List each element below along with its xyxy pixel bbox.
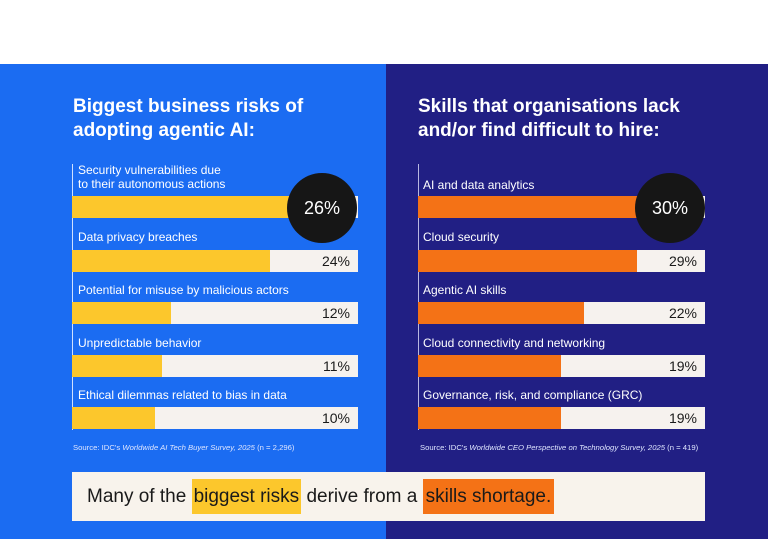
panel: left risks bbox=[0, 64, 386, 539]
row 5: Ethical dilemmas related to bias in data bbox=[78, 388, 287, 402]
right bar chart: 19% bbox=[669, 358, 697, 374]
left bar chart: 11% bbox=[323, 358, 350, 374]
banner: conclusion bbox=[72, 472, 705, 521]
right bar chart: 19% bbox=[669, 410, 697, 426]
banner: conclusion: Many of the biggest risks derive from a skills shortage. bbox=[87, 486, 551, 507]
row 1 bbox=[78, 163, 225, 191]
left title: adopting agentic AI: bbox=[73, 120, 255, 141]
row 1: AI and data analytics bbox=[423, 178, 534, 192]
callout: 30% bbox=[635, 173, 705, 243]
right bar chart: 22% bbox=[669, 305, 697, 321]
right bar chart: 29% bbox=[669, 253, 697, 269]
row 5: Governance, risk, and compliance (GRC) bbox=[423, 388, 642, 402]
right title: Skills that organisations lack bbox=[418, 96, 680, 117]
left title bbox=[73, 96, 304, 141]
panel: right skills bbox=[386, 64, 768, 539]
row 4: Cloud connectivity and networking bbox=[423, 336, 605, 350]
row 4: Unpredictable behavior bbox=[78, 336, 201, 350]
row 3: Potential for misuse by malicious actors bbox=[78, 283, 289, 297]
right title bbox=[418, 96, 680, 141]
row 2: Data privacy breaches bbox=[78, 230, 197, 244]
callout: 30%: 30% bbox=[652, 198, 688, 218]
left title: Biggest business risks of bbox=[73, 96, 303, 117]
right title: and/or find difficult to hire: bbox=[418, 120, 660, 141]
right axis line bbox=[418, 164, 419, 430]
right source: Source: IDC's Worldwide CEO Perspective on Technology Survey, 2025 (n = 419) bbox=[420, 443, 698, 452]
row 1: to their autonomous actions bbox=[78, 177, 225, 191]
left bar chart: 10% bbox=[322, 410, 350, 426]
right bar chart bbox=[418, 178, 705, 429]
left axis line bbox=[72, 164, 73, 430]
callout: 26% bbox=[287, 173, 357, 243]
row 2: Cloud security bbox=[423, 230, 499, 244]
left bar chart bbox=[72, 163, 358, 429]
row 3: Agentic AI skills bbox=[423, 283, 506, 297]
left bar chart: 24% bbox=[322, 253, 350, 269]
left bar chart: 12% bbox=[322, 305, 350, 321]
callout: 26%: 26% bbox=[304, 198, 340, 218]
left source: Source: IDC's Worldwide AI Tech Buyer Survey, 2025 (n = 2,296) bbox=[73, 443, 294, 452]
row 1: Security vulnerabilities due bbox=[78, 163, 221, 177]
